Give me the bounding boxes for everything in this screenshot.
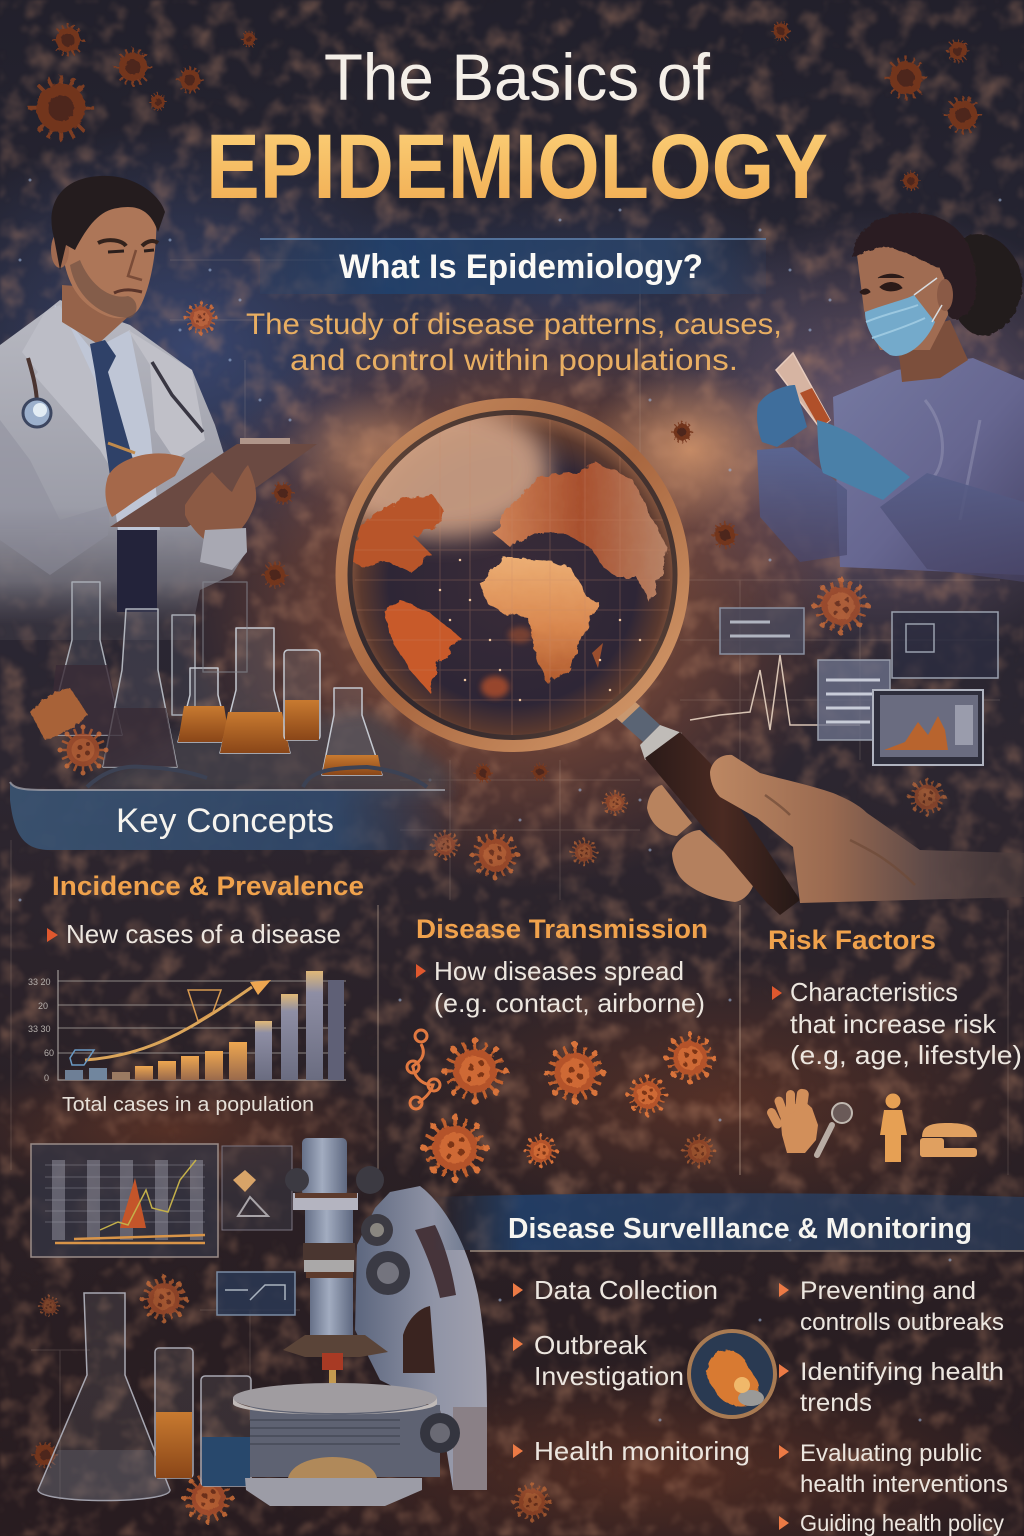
head (62, 201, 156, 318)
trend arrow (70, 980, 271, 1065)
icon: burger (920, 1123, 977, 1157)
title: EPIDEMIOLOGY (206, 116, 828, 218)
bullets left: Outbreak (534, 1330, 648, 1360)
panel: disease transmission: Disease Transmission (416, 914, 708, 944)
icon: person (880, 1094, 907, 1162)
chart screen (31, 1144, 292, 1257)
nosepiece (283, 1335, 388, 1357)
base (250, 1405, 440, 1477)
heading band: What Is Epidemiology? (339, 248, 703, 286)
knobs (356, 1166, 384, 1194)
bar chart: 20 (38, 1001, 48, 1011)
panel: incidence and prevalence: Incidence & Prevalence (52, 871, 364, 901)
shirt (833, 358, 1024, 575)
arm (355, 1186, 487, 1490)
tubing (87, 767, 427, 787)
face mask (865, 295, 935, 356)
test tube (776, 353, 830, 428)
icon: spoon (817, 1103, 852, 1155)
bullets right: Evaluating public (800, 1440, 982, 1467)
icon: molecule (407, 1030, 440, 1109)
handle (615, 700, 800, 915)
globe continents (353, 415, 670, 735)
icon: hand (765, 1088, 818, 1153)
bullets right: Preventing and (800, 1277, 976, 1305)
left sleeve (757, 447, 847, 562)
illustration: doctor with clipboard (0, 176, 317, 640)
bullet: New cases of a disease (66, 919, 341, 949)
illustration: lab flasks (30, 582, 450, 795)
title (206, 40, 828, 218)
panel: incidence and prevalence: Total cases in a population (62, 1094, 314, 1116)
fingers behind handle (647, 785, 692, 836)
panel: disease surveillance (432, 1193, 1024, 1536)
bar chart (28, 970, 346, 1083)
right sleeve (880, 473, 1024, 582)
eye (860, 274, 904, 294)
panel: what is epidemiology (246, 238, 782, 377)
neck (62, 285, 130, 344)
bullets right: health interventions (800, 1471, 1008, 1498)
illustration: bottom flasks (38, 1293, 251, 1500)
stethoscope (23, 358, 51, 427)
clipboard (110, 438, 317, 527)
transmission viruses (420, 1031, 717, 1183)
bullets right: trends (800, 1389, 872, 1417)
bar chart: 0 (44, 1073, 49, 1083)
definition text: and control within populations. (290, 344, 738, 377)
illustration: lab worker in mask (757, 213, 1024, 582)
neck (897, 320, 968, 382)
heading band (10, 782, 460, 850)
heading band (432, 1193, 1024, 1251)
necktie (90, 340, 136, 490)
pen in pocket (152, 362, 203, 432)
illustration: dashboard screens (690, 608, 998, 765)
icon: outbreak lens (689, 1331, 775, 1417)
title: The Basics of (324, 40, 711, 114)
bar chart: 33 20 (28, 977, 51, 987)
gloves (757, 385, 910, 500)
bullet: Characteristics (790, 977, 958, 1007)
bullet: How diseases spread (434, 956, 684, 986)
bullets right: Identifying health (800, 1358, 1004, 1386)
lab coat (0, 300, 247, 640)
definition text: The study of disease patterns, causes, (246, 308, 782, 341)
bullets left (513, 1275, 750, 1466)
bullets left: Data Collection (534, 1275, 718, 1305)
bullets right (779, 1277, 1008, 1536)
bullets right: controlls outbreaks (800, 1309, 1004, 1336)
lab table (70, 710, 450, 795)
panel: incidence and prevalence (28, 871, 364, 1116)
illustration: microscope (233, 1138, 487, 1506)
heading: Key Concepts (116, 802, 334, 840)
heading band (260, 238, 766, 294)
hair (853, 213, 976, 319)
definition text (246, 308, 782, 377)
bar chart: 33 30 (28, 1024, 51, 1034)
bullet (772, 977, 1022, 1070)
bullets left: Health monitoring (534, 1436, 750, 1466)
bullet: (e.g. contact, airborne) (434, 988, 705, 1018)
face (857, 234, 948, 350)
bullet (416, 956, 705, 1018)
bar chart: 60 (44, 1048, 54, 1058)
panel: risk factors (765, 925, 1022, 1162)
panel: risk factors: Risk Factors (768, 925, 936, 955)
bullet: (e.g, age, lifestyle) (790, 1040, 1022, 1070)
tube (302, 1138, 347, 1196)
lens ring (350, 412, 676, 738)
hair ponytail (950, 234, 1022, 336)
small screen (217, 1272, 295, 1315)
holding hand (185, 465, 256, 548)
bullets right: Guiding health policy (800, 1510, 1004, 1536)
panel: key concepts (10, 767, 460, 850)
magnifying glass with globe (330, 402, 684, 746)
heading band: Disease Survelllance & Monitoring (508, 1213, 972, 1245)
palm and thumb (710, 755, 1024, 903)
hand holding magnifier (615, 700, 1024, 915)
panel: disease transmission (407, 914, 717, 1183)
writing hand (105, 453, 185, 517)
bullets left: Investigation (534, 1361, 684, 1391)
bullet: that increase risk (790, 1009, 997, 1039)
